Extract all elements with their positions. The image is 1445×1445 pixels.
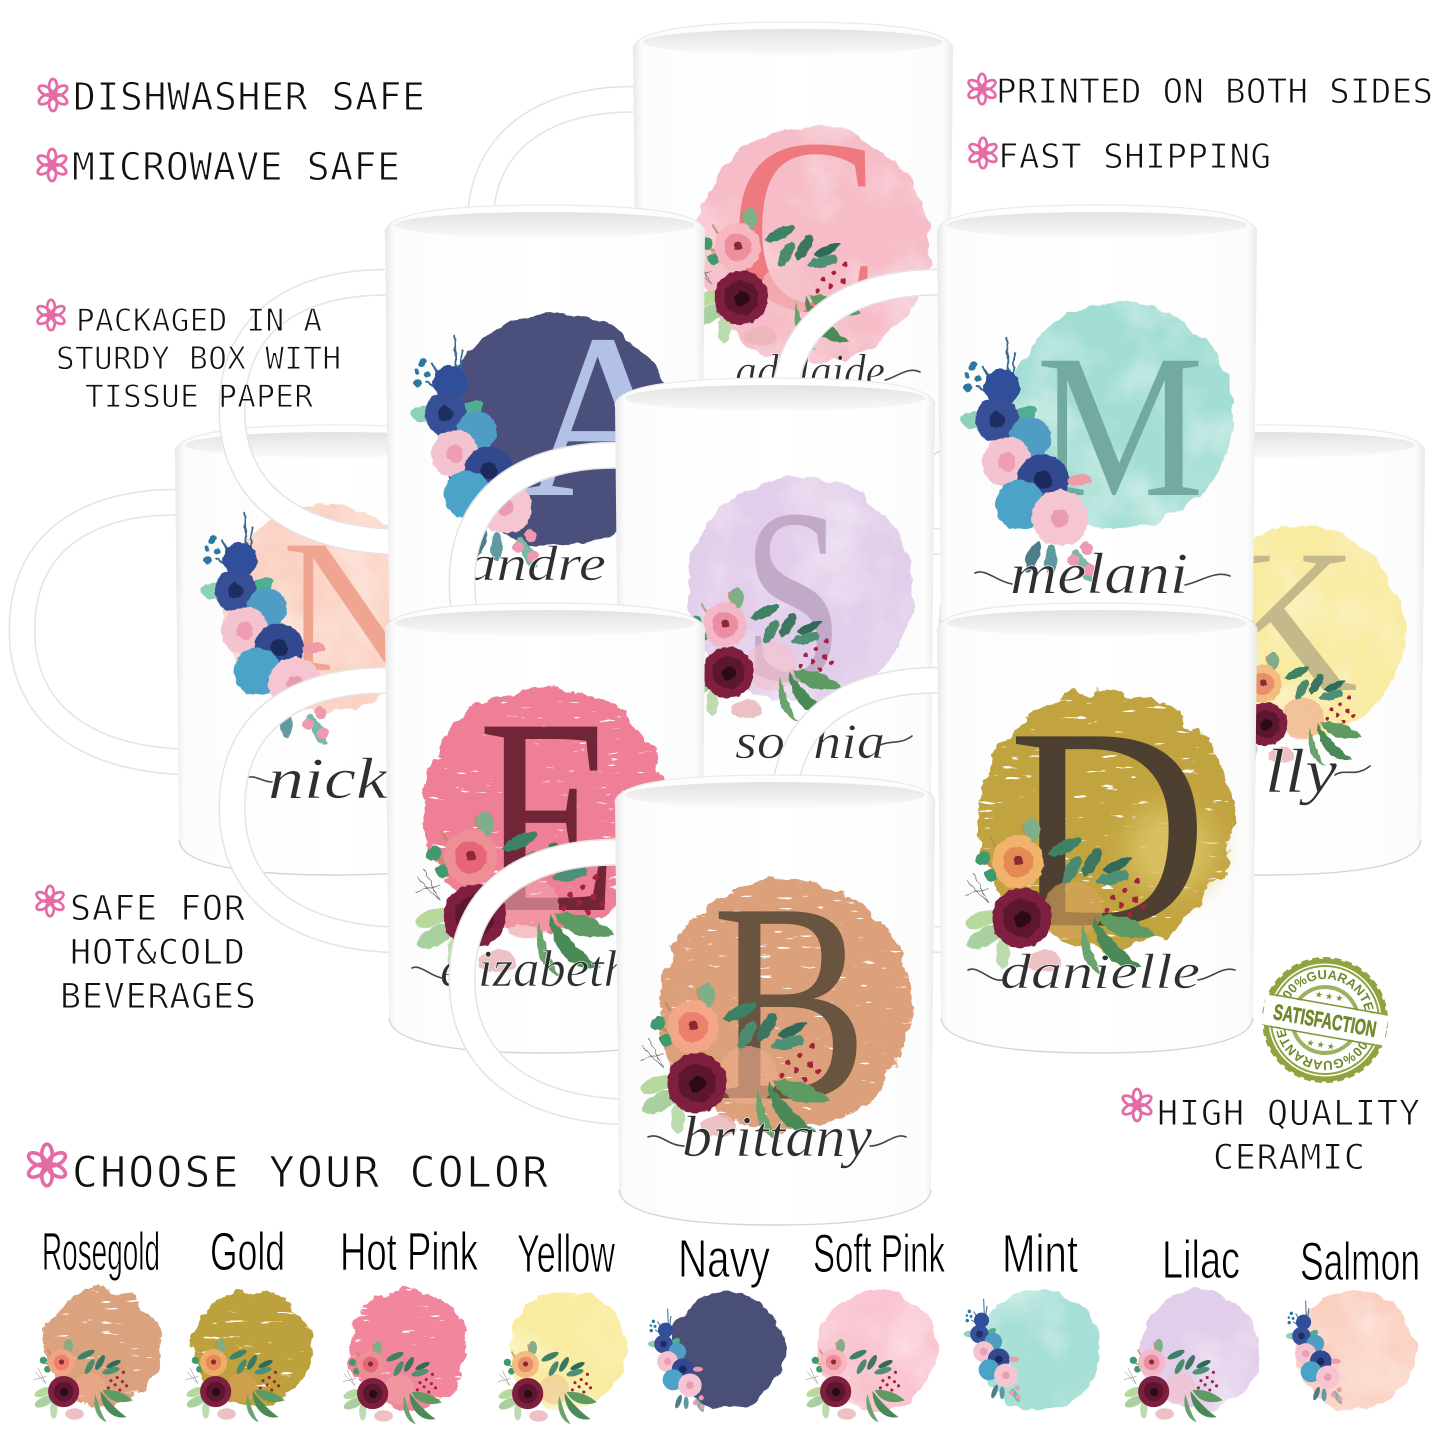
letter S: S (743, 458, 843, 735)
floral bouquet (688, 207, 861, 351)
swatch: hot pink: Hot Pink (340, 1222, 479, 1282)
swatch: navy (648, 1229, 785, 1413)
swatch: mint: Mint (1002, 1224, 1078, 1284)
name danielle: danielle (1000, 943, 1200, 999)
swatch: mint (964, 1224, 1100, 1410)
swatch: yellow: Yellow (517, 1224, 616, 1284)
name sophia: sophia (735, 713, 885, 769)
letter A: A (520, 286, 690, 546)
watercolor blob E (423, 686, 667, 930)
watercolor blob K (1195, 527, 1405, 737)
feature: high quality ceramic: CERAMIC (1213, 1138, 1365, 1178)
mug: K (yellow) (952, 425, 1425, 875)
letter D: D (1008, 669, 1208, 988)
swatch: soft pink (805, 1224, 946, 1422)
floral bouquet (678, 587, 842, 723)
feature: microwave safe: MICROWAVE SAFE (72, 145, 400, 189)
floral bouquet (638, 982, 830, 1142)
name flourish (968, 969, 1235, 980)
name andrea: andre (466, 535, 606, 591)
floral bouquet (410, 334, 541, 570)
name melani: melani (1010, 541, 1188, 606)
name flourish (880, 736, 912, 745)
guarantee stamp: 100%GUARANTEE (1283, 970, 1375, 1014)
mug: E (hot pink) (232, 603, 705, 1053)
letter K: K (1210, 508, 1358, 735)
swatch: gold (185, 1222, 311, 1422)
name kelly: lly (1265, 738, 1338, 806)
name brittany: brittany (682, 1104, 872, 1169)
feature: safe for hot and cold beverages (35, 886, 256, 1017)
name flourish (975, 572, 1230, 585)
floral bouquet (960, 336, 1097, 585)
swatch: lilac (1123, 1230, 1260, 1422)
name elizabeth: elizabeth (440, 941, 630, 998)
swatch: rosegold (33, 1222, 161, 1422)
floral bouquet (413, 810, 614, 978)
mug: N (salmon) (22, 425, 495, 875)
floral bouquet (1224, 651, 1362, 767)
mug: S (lilac) (462, 378, 935, 828)
guarantee stamp: 100%GUARANTEE (1275, 1026, 1367, 1070)
floral bouquet (200, 511, 331, 747)
heading: choose your color: CHOOSE YOUR COLOR (72, 1148, 548, 1198)
watercolor blob N (222, 505, 428, 711)
watercolor blob M (1007, 302, 1233, 528)
feature: high quality ceramic: HIGH QUALITY (1157, 1094, 1420, 1134)
watercolor blob S (687, 477, 913, 703)
swatch: soft pink: Soft Pink (813, 1224, 946, 1284)
feature: high quality ceramic (1121, 1089, 1420, 1178)
feature: safe for hot and cold beverages: HOT&COLD (70, 933, 245, 973)
mug: A (navy) (232, 205, 705, 655)
name flourish (885, 370, 920, 380)
guarantee stamp: ★ ★ ★ (1306, 1037, 1336, 1052)
letter N: N (282, 502, 419, 712)
guarantee stamp: ★ ★ ★ (1314, 989, 1344, 1004)
letter C: C (730, 88, 880, 365)
watercolor blob A (439, 313, 673, 547)
mug: D (gold) (784, 603, 1257, 1053)
watercolor blob C (694, 127, 930, 363)
feature: packaged in a sturdy box: STURDY BOX WITH (56, 341, 341, 377)
swatch: navy: Navy (678, 1229, 770, 1289)
name nicki: nick (268, 746, 390, 811)
name flourish (246, 777, 272, 782)
feature: packaged in a sturdy box: PACKAGED IN A (76, 303, 322, 339)
swatch: salmon (1286, 1232, 1420, 1410)
name flourish (1335, 766, 1370, 775)
guarantee stamp: SATISFACTION (1272, 999, 1378, 1042)
foil blob B (659, 879, 911, 1131)
swatch: rosegold: Rosegold (42, 1222, 160, 1282)
feature: printed on both sides: PRINTED ON BOTH SIDES (996, 72, 1433, 112)
swatch: hot pink (340, 1222, 479, 1424)
swatch: gold: Gold (210, 1222, 285, 1282)
mug: M (mint) (784, 205, 1257, 655)
swatch: yellow (497, 1224, 626, 1424)
mug: C (soft pink) (480, 22, 953, 472)
feature: safe for hot and cold beverages: BEVERAGES (60, 977, 256, 1017)
name adelaide: adelaide (735, 345, 885, 398)
name flourish (412, 967, 442, 978)
letter M: M (1036, 313, 1204, 540)
name flourish (648, 1136, 906, 1146)
feature: packaged in a sturdy box: TISSUE PAPER (85, 379, 313, 415)
letter E: E (478, 660, 618, 971)
guarantee stamp (1262, 957, 1388, 1083)
feature: fast shipping: FAST SHIPPING (998, 137, 1271, 177)
letter B: B (712, 844, 868, 1160)
foil blob D (978, 692, 1234, 948)
feature: packaged in a sturdy box (36, 300, 341, 415)
mug: B (rose gold) (462, 775, 935, 1225)
foil highlight (1125, 805, 1215, 895)
floral bouquet (963, 817, 1155, 977)
feature: safe for hot and cold beverages: SAFE FOR (70, 889, 246, 929)
feature: dishwasher safe: DISHWASHER SAFE (73, 75, 425, 119)
swatch: lilac: Lilac (1162, 1230, 1240, 1290)
